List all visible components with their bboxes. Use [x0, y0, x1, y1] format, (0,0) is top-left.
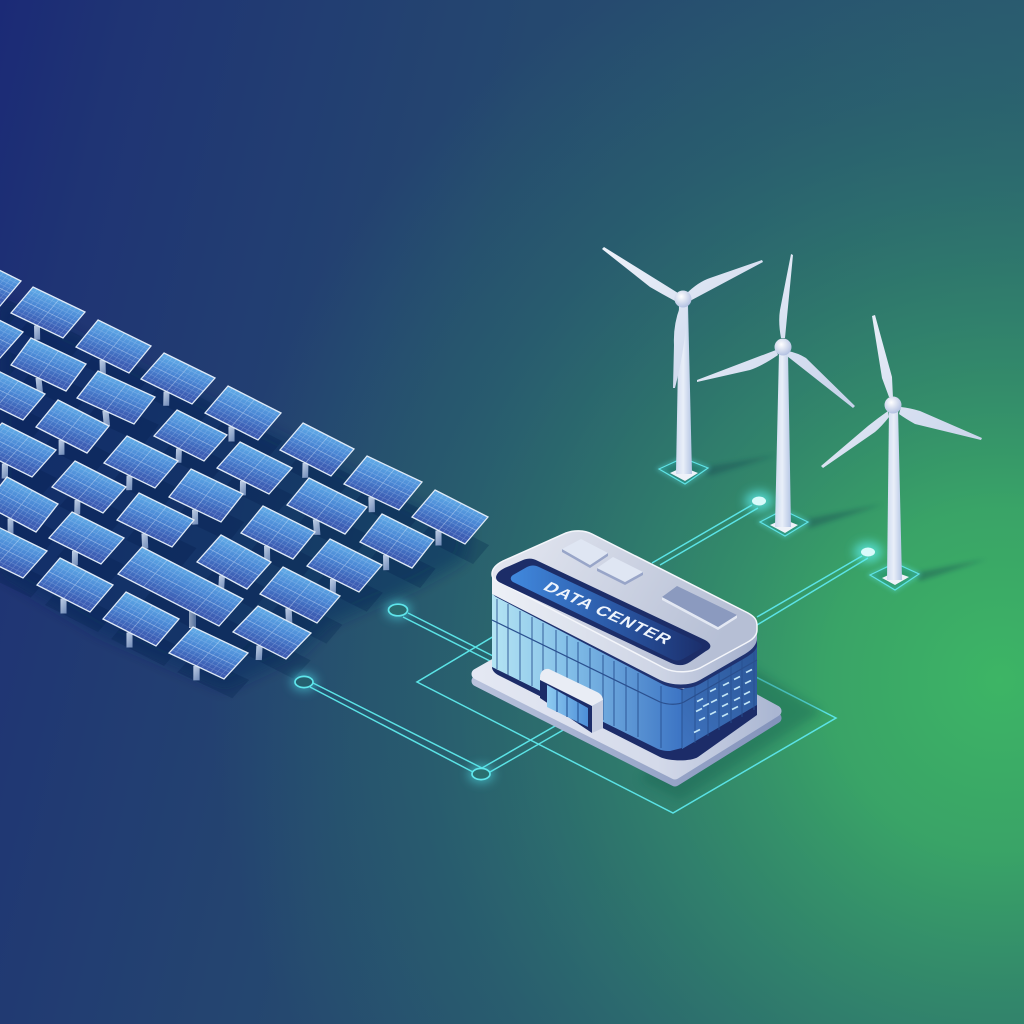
line: junction to building [482, 722, 572, 772]
solar panel [334, 456, 440, 531]
solar panel [351, 514, 451, 589]
glowing base ring [870, 563, 919, 590]
sign label: DATA CENTER [539, 579, 677, 648]
connector lines [310, 505, 868, 772]
ground shadow [640, 660, 822, 800]
glowing node: turbine two line [745, 491, 773, 511]
solar panel [159, 627, 266, 699]
blades [602, 247, 763, 388]
solar panel [0, 525, 64, 598]
base [770, 519, 798, 533]
field ground shade [0, 300, 470, 690]
solar panel [0, 306, 40, 378]
turbine shadow [700, 455, 777, 476]
solar panel [250, 567, 359, 644]
roof unit two [597, 557, 643, 585]
roof unit one [562, 539, 608, 568]
base [670, 467, 698, 481]
solar panel [270, 423, 371, 496]
solar panel field [0, 255, 505, 699]
entrance door [540, 669, 603, 733]
solar panel [222, 606, 328, 679]
hub [884, 396, 902, 414]
data center building [477, 531, 822, 800]
solar panel [2, 338, 104, 411]
solar panel [39, 512, 141, 584]
glowing base ring [659, 458, 708, 484]
solar panel [207, 442, 309, 514]
solar panel [402, 490, 505, 564]
base plate side [477, 617, 776, 781]
solar panel [94, 436, 195, 508]
tower [887, 408, 902, 580]
line: wind turbine three to building [757, 556, 868, 625]
solar panel [108, 493, 212, 567]
hub [774, 338, 792, 356]
blades [821, 315, 982, 468]
base [882, 572, 909, 585]
solar panel [297, 539, 399, 612]
solar panel [232, 506, 332, 579]
connector node: solar two [291, 673, 317, 691]
roof vent [662, 586, 737, 630]
solar panel [131, 353, 232, 423]
turbine shadow [914, 559, 987, 581]
glass mullions [497, 599, 754, 748]
solar panel [0, 368, 62, 440]
solar panel [68, 371, 174, 444]
connector node: solar one [385, 601, 411, 619]
glowing base ring [760, 510, 808, 536]
wind turbine two [697, 254, 883, 536]
glass transom [492, 620, 757, 704]
wind turbine three [821, 315, 987, 590]
solar panel [27, 558, 130, 632]
glowing node: turbine three line [854, 542, 882, 562]
solar panel [144, 410, 244, 480]
turbine shadow [802, 504, 883, 528]
wide double solar panel [108, 547, 276, 654]
solar panel [2, 287, 102, 357]
solar panel [67, 320, 168, 393]
solar panel [27, 400, 126, 473]
data lights [694, 670, 752, 732]
solar panel [42, 461, 143, 533]
sign inner panel [511, 566, 702, 660]
sign panel [496, 559, 710, 665]
roof top [492, 531, 757, 672]
solar panel [0, 477, 75, 553]
roof band [492, 574, 757, 688]
solar panel [93, 592, 196, 666]
tower [676, 305, 692, 474]
line: wind turbine two to building [652, 505, 758, 565]
line: solar node two to junction [310, 683, 482, 772]
hub [674, 290, 692, 308]
solar panel [187, 535, 288, 609]
line: solar node one to building [403, 613, 495, 661]
base plate top [477, 610, 776, 774]
tower [775, 352, 791, 527]
blades [697, 254, 855, 408]
solar panel [195, 386, 298, 460]
side glass wall [682, 640, 757, 749]
solar panel [278, 478, 386, 555]
ground outline around data center [417, 586, 836, 813]
navy base strip [492, 660, 757, 760]
front glass wall [492, 594, 682, 751]
solar panel [0, 423, 74, 497]
connector node: junction [468, 765, 494, 783]
solar panel [160, 469, 260, 542]
wind turbine one [602, 247, 777, 484]
solar panel [0, 255, 38, 325]
